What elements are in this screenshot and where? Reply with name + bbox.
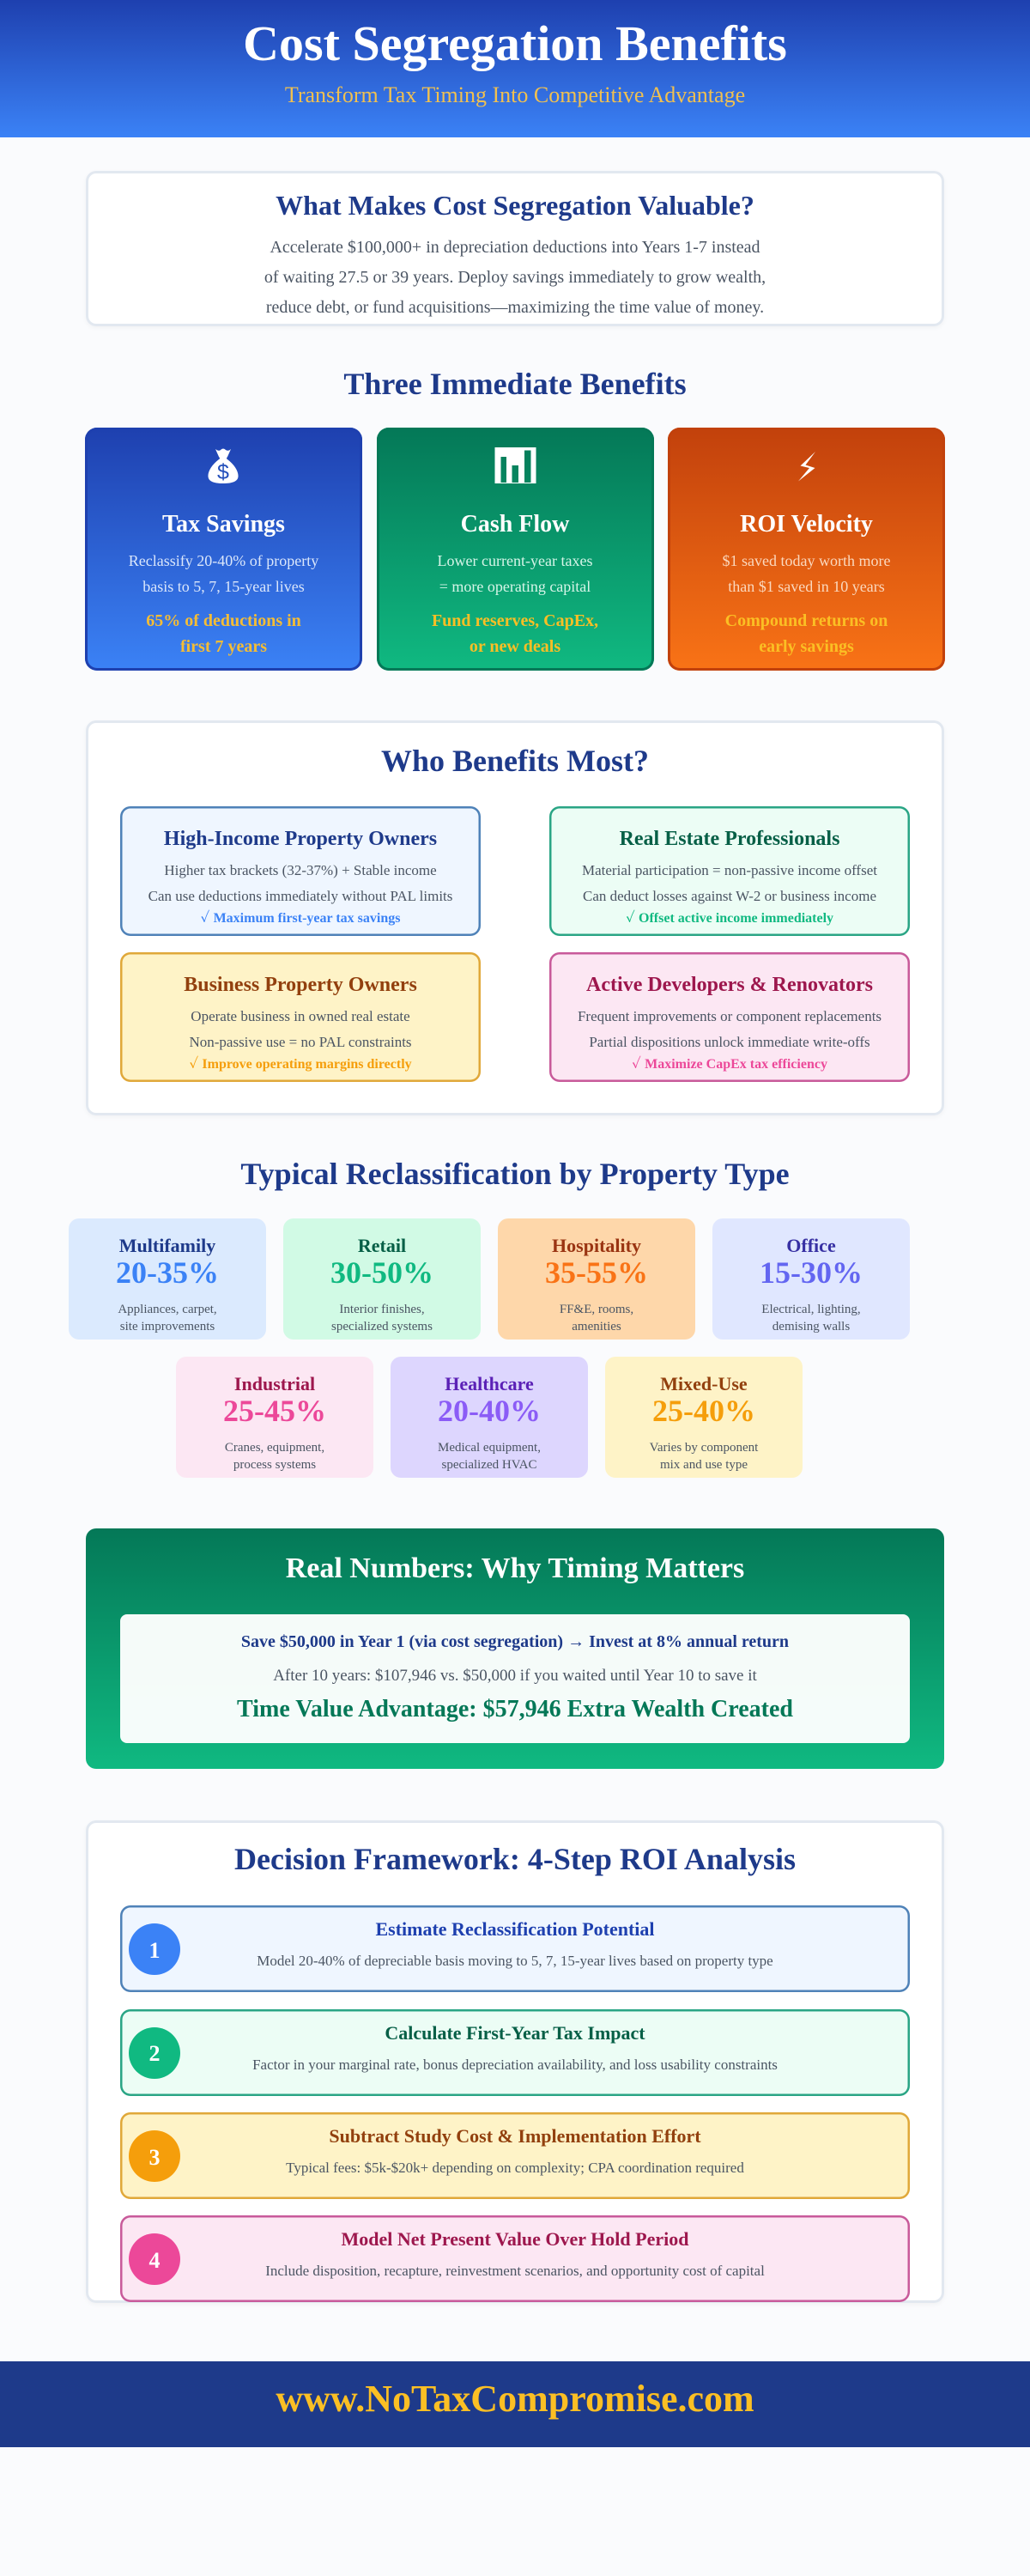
heading: Who Benefits Most? [381, 744, 649, 778]
heading: What Makes Cost Segregation Valuable? [276, 190, 754, 221]
tile: industrial [176, 1357, 373, 1478]
icon: money bag: $ [217, 460, 229, 484]
panel: who benefits most [86, 720, 944, 1115]
tile description line 1: Appliances, carpet, [118, 1303, 217, 1316]
icon: money bag [208, 448, 239, 484]
audience: active developers and renovators [549, 952, 910, 1082]
step 2 [120, 2009, 910, 2095]
description line 2: basis to 5, 7, 15-year lives [142, 578, 305, 595]
header banner [0, 0, 1030, 137]
audience takeaway: ✓ Maximize CapEx tax efficiency [632, 1057, 827, 1072]
tile percentage: 30-50% [330, 1255, 433, 1290]
tile description line 2: specialized HVAC [442, 1458, 536, 1472]
icon: lightning bolt [798, 452, 815, 481]
highlight line 2: first 7 years [180, 637, 267, 656]
icon: bar chart [494, 447, 536, 483]
tile: mixed-use [605, 1357, 803, 1478]
intro line 2: of waiting 27.5 or 39 years. Deploy savings immediately to grow wealth, [264, 268, 766, 287]
highlight line 2: or new deals [470, 637, 560, 656]
description line 1: Reclassify 20-40% of property [129, 552, 318, 569]
tile name: Multifamily [119, 1235, 215, 1256]
step number [129, 2026, 180, 2078]
panel: cash flow [376, 428, 654, 671]
tile description line 2: demising walls [772, 1320, 850, 1334]
highlight line 1: 65% of deductions in [146, 611, 301, 630]
website url: www.NoTaxCompromise.com [276, 2378, 754, 2420]
panel: real numbers [86, 1528, 944, 1769]
subtitle: Transform Tax Timing Into Competitive Advantage [285, 82, 745, 107]
description line 1: $1 saved today worth more [723, 552, 890, 569]
tile name: Hospitality [552, 1235, 641, 1256]
step number [129, 1923, 180, 1975]
tile description line 1: Varies by component [650, 1441, 758, 1455]
scenario: Save $50,000 in Year 1 (via cost segregation) → Invest at 8% annual return [241, 1632, 789, 1651]
tile description line 2: mix and use type [660, 1458, 748, 1472]
step 4 [120, 2215, 910, 2302]
audience line 1: Material participation = non-passive income offset [582, 862, 877, 878]
tile percentage: 20-40% [438, 1394, 541, 1428]
step title: Estimate Reclassification Potential [375, 1918, 655, 1940]
tile description line 1: Medical equipment, [438, 1441, 541, 1455]
audience line 1: Frequent improvements or component replacements [578, 1008, 882, 1024]
panel: what makes cost segregation valuable [86, 171, 944, 326]
panel: roi velocity [668, 428, 945, 671]
tile: healthcare [391, 1357, 588, 1478]
step number: 4 [149, 2248, 160, 2273]
tile percentage: 35-55% [545, 1255, 648, 1290]
audience title: Business Property Owners [184, 974, 417, 996]
audience: business property owners [120, 952, 481, 1082]
description line 1: Lower current-year taxes [438, 552, 592, 569]
audience line 2: Partial dispositions unlock immediate write-offs [589, 1034, 870, 1050]
tile name: Retail [358, 1235, 406, 1256]
description line 2: than $1 saved in 10 years [728, 578, 885, 595]
step 3 [120, 2112, 910, 2199]
heading: reclassification by property type: Typical Reclassification by Property Type [240, 1157, 790, 1191]
step 1 [120, 1905, 910, 1992]
tile percentage: 25-45% [223, 1394, 326, 1428]
step number [129, 2233, 180, 2285]
tile description line 2: site improvements [120, 1320, 215, 1334]
audience line 1: Higher tax brackets (32-37%) + Stable income [164, 862, 437, 878]
step number [129, 2130, 180, 2182]
audience title: Real Estate Professionals [620, 828, 839, 850]
tile name: Healthcare [445, 1373, 534, 1394]
intro line 1: Accelerate $100,000+ in depreciation deductions into Years 1-7 instead [270, 238, 760, 257]
step number: 2 [149, 2041, 160, 2066]
audience line 1: Operate business in owned real estate [191, 1008, 410, 1024]
heading: three immediate benefits: Three Immediate Benefits [343, 367, 687, 401]
highlight line 1: Fund reserves, CapEx, [432, 611, 598, 630]
tile percentage: 25-40% [652, 1394, 755, 1428]
audience line 2: Can deduct losses against W-2 or business income [583, 888, 876, 904]
tile description line 1: Cranes, equipment, [225, 1441, 324, 1455]
tile description line 2: specialized systems [331, 1320, 433, 1334]
tile description line 2: process systems [233, 1458, 316, 1472]
audience takeaway: ✓ Maximum first-year tax savings [201, 911, 400, 926]
step title: Subtract Study Cost & Implementation Effort [329, 2125, 701, 2147]
tile: retail [283, 1218, 481, 1340]
audience title: Active Developers & Renovators [586, 974, 873, 996]
callout: time value example [120, 1614, 910, 1743]
intro line 3: reduce debt, or fund acquisitions—maximizing the time value of money. [266, 298, 764, 317]
tile name: Office [786, 1235, 836, 1256]
audience takeaway: ✓ Improve operating margins directly [189, 1057, 412, 1072]
step description: Model 20-40% of depreciable basis moving to 5, 7, 15-year lives based on property type [257, 1953, 773, 1969]
step title: Calculate First-Year Tax Impact [385, 2022, 645, 2044]
step description: Factor in your marginal rate, bonus depreciation availability, and loss usability constraints [252, 2057, 778, 2073]
highlight line 2: early savings [759, 637, 854, 656]
tile: office [712, 1218, 910, 1340]
audience line 2: Non-passive use = no PAL constraints [189, 1034, 412, 1050]
panel: tax savings [85, 428, 362, 671]
step description: Include disposition, recapture, reinvestment scenarios, and opportunity cost of capital [265, 2263, 765, 2279]
step description: Typical fees: $5k-$20k+ depending on complexity; CPA coordination required [286, 2160, 744, 2176]
title: Cost Segregation Benefits [243, 15, 787, 71]
tile: hospitality [498, 1218, 695, 1340]
audience: high-income property owners [120, 806, 481, 936]
tile description line 1: Interior finishes, [339, 1303, 425, 1316]
tile percentage: 20-35% [116, 1255, 219, 1290]
card title: ROI Velocity [740, 511, 873, 538]
step number: 3 [149, 2145, 160, 2170]
highlight line 1: Compound returns on [725, 611, 888, 630]
panel: decision framework [86, 1820, 944, 2303]
comparison: After 10 years: $107,946 vs. $50,000 if you waited until Year 10 to save it [273, 1667, 757, 1685]
audience: real estate professionals [549, 806, 910, 936]
tile name: Industrial [234, 1373, 315, 1394]
tile description line 1: Electrical, lighting, [761, 1303, 861, 1316]
tile percentage: 15-30% [760, 1255, 863, 1290]
tile description line 2: amenities [572, 1320, 621, 1334]
card title: Tax Savings [162, 511, 285, 538]
audience takeaway: ✓ Offset active income immediately [626, 911, 833, 926]
heading: Real Numbers: Why Timing Matters [286, 1552, 744, 1584]
result: Time Value Advantage: $57,946 Extra Wealth Created [237, 1696, 793, 1722]
footer banner [0, 2361, 1030, 2447]
step title: Model Net Present Value Over Hold Period [342, 2228, 688, 2250]
tile: multifamily [69, 1218, 266, 1340]
tile description line 1: FF&E, rooms, [560, 1303, 633, 1316]
audience line 2: Can use deductions immediately without PAL limits [148, 888, 452, 904]
card title: Cash Flow [461, 511, 569, 538]
step number: 1 [149, 1938, 160, 1963]
heading: Decision Framework: 4-Step ROI Analysis [234, 1842, 796, 1876]
audience title: High-Income Property Owners [164, 828, 437, 850]
tile name: Mixed-Use [660, 1373, 748, 1394]
description line 2: = more operating capital [439, 578, 591, 595]
